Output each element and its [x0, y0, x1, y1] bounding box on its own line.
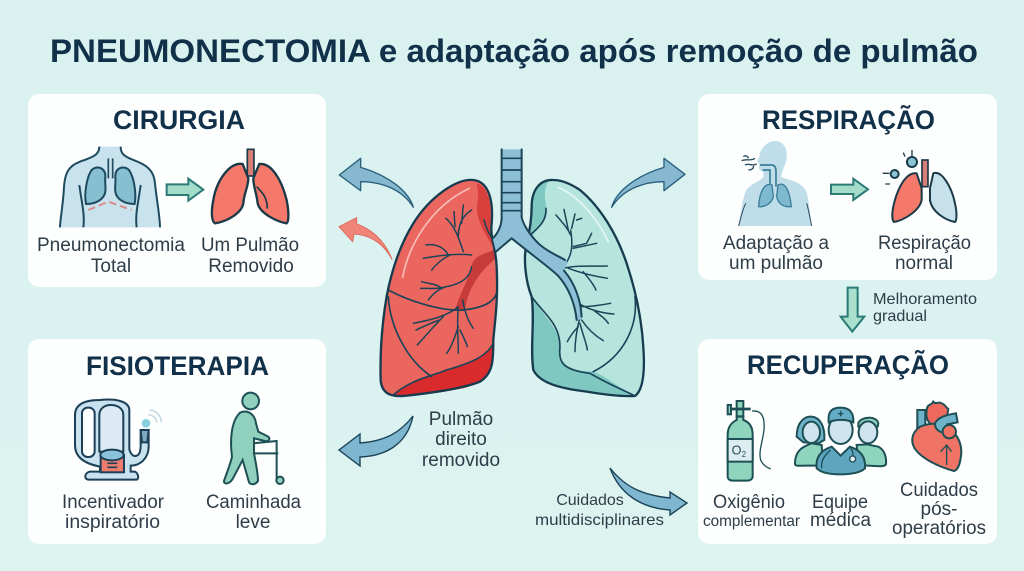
label: pneumonectomia total: [37, 235, 185, 277]
panel: cirurgia: [28, 94, 326, 287]
label: equipe medica: Equipe: [812, 492, 868, 513]
label: cuidados pos-operatorios: [892, 480, 986, 539]
label: cuidados pos-operatorios: pós-: [921, 499, 957, 520]
arrow: small red: [339, 218, 392, 259]
icon: lungs one removed: [212, 149, 288, 223]
arrow: cirurgia: [167, 179, 203, 201]
heading: recuperacao: RECUPERAÇÃO: [747, 350, 949, 380]
label: cuidados pos-operatorios: operatórios: [892, 518, 986, 539]
arrow: bottom left: [339, 416, 413, 466]
label: equipe medica: médica: [810, 510, 871, 531]
label: incentivador inspiratorio: [62, 492, 165, 533]
label: oxigenio complementar: [703, 492, 800, 530]
label: respiracao normal: Respiração: [878, 233, 971, 254]
label: equipe medica: [810, 492, 871, 531]
label: um pulmao removido: Removido: [208, 256, 294, 277]
central lungs illustration: [339, 149, 685, 396]
label: cuidados pos-operatorios: Cuidados: [900, 480, 978, 501]
label: incentivador inspiratorio: Incentivador: [62, 492, 165, 513]
arrow: bottom right: [610, 468, 687, 515]
label: adaptacao a um pulmao: [723, 233, 829, 274]
icon: heart: [912, 402, 961, 471]
icon: incentive spirometer: [75, 400, 161, 480]
label: adaptacao a um pulmao: Adaptação a: [723, 233, 829, 254]
arrow: top right blue: [612, 158, 685, 207]
label: caminhada leve: leve: [236, 512, 270, 533]
label: incentivador inspiratorio: inspiratório: [65, 512, 160, 533]
icon: medical team: [795, 408, 886, 474]
trachea and bronchi: [493, 149, 582, 322]
heading: cirurgia: CIRURGIA: [113, 105, 245, 135]
icon: person with walker: [224, 393, 284, 484]
icon: person breathing: [739, 141, 812, 226]
label: pulmao direito removido: direito: [435, 429, 487, 450]
label: cuidados multidisciplinares: Cuidados: [556, 492, 624, 509]
title: PNEUMONECTOMIA e adaptação após remoção de pulmão: [50, 33, 978, 69]
right lung removed (red): [381, 180, 497, 396]
panel: fisioterapia: [28, 339, 326, 544]
arrow: top left blue: [339, 158, 413, 207]
label: pulmao direito removido: removido: [422, 450, 500, 471]
label: melhoramento gradual: [873, 291, 977, 325]
label: pulmao direito removido: Pulmão: [429, 409, 493, 430]
label: melhoramento gradual: Melhoramento: [873, 291, 977, 308]
label: pulmao direito removido: [422, 409, 500, 471]
icon: oxygen cylinder: [728, 401, 771, 481]
label: melhoramento gradual: gradual: [873, 308, 927, 325]
label: um pulmao removido: [201, 235, 299, 277]
label: oxigenio complementar: Oxigênio: [713, 492, 785, 513]
label: adaptacao a um pulmao: um pulmão: [729, 253, 823, 274]
heading: fisioterapia: FISIOTERAPIA: [86, 351, 269, 381]
arrow: respiracao: [831, 179, 868, 200]
label: um pulmao removido: Um Pulmão: [201, 235, 299, 256]
icon: torso with lungs: [60, 147, 160, 227]
label: pneumonectomia total: Pneumonectomia: [37, 235, 185, 256]
panel: recuperacao: [698, 339, 997, 544]
arrow: melhoramento gradual: [841, 288, 864, 332]
label: cuidados multidisciplinares: [535, 492, 664, 529]
label: respiracao normal: [878, 233, 971, 274]
label: cuidados multidisciplinares: multidisciplinares: [535, 512, 664, 529]
icon: oxygen cylinder: 2: [742, 450, 747, 459]
label: oxigenio complementar: complementar: [703, 513, 800, 530]
panel: respiracao: [698, 94, 997, 280]
icon: lungs with oxygen: [883, 150, 956, 222]
label: caminhada leve: Caminhada: [206, 492, 301, 513]
icon: oxygen cylinder: O: [732, 443, 742, 457]
left lung (teal): [525, 180, 644, 396]
heading: respiracao: RESPIRAÇÃO: [762, 105, 935, 135]
label: respiracao normal: normal: [895, 253, 953, 274]
label: pneumonectomia total: Total: [91, 256, 131, 277]
label: caminhada leve: [206, 492, 301, 533]
